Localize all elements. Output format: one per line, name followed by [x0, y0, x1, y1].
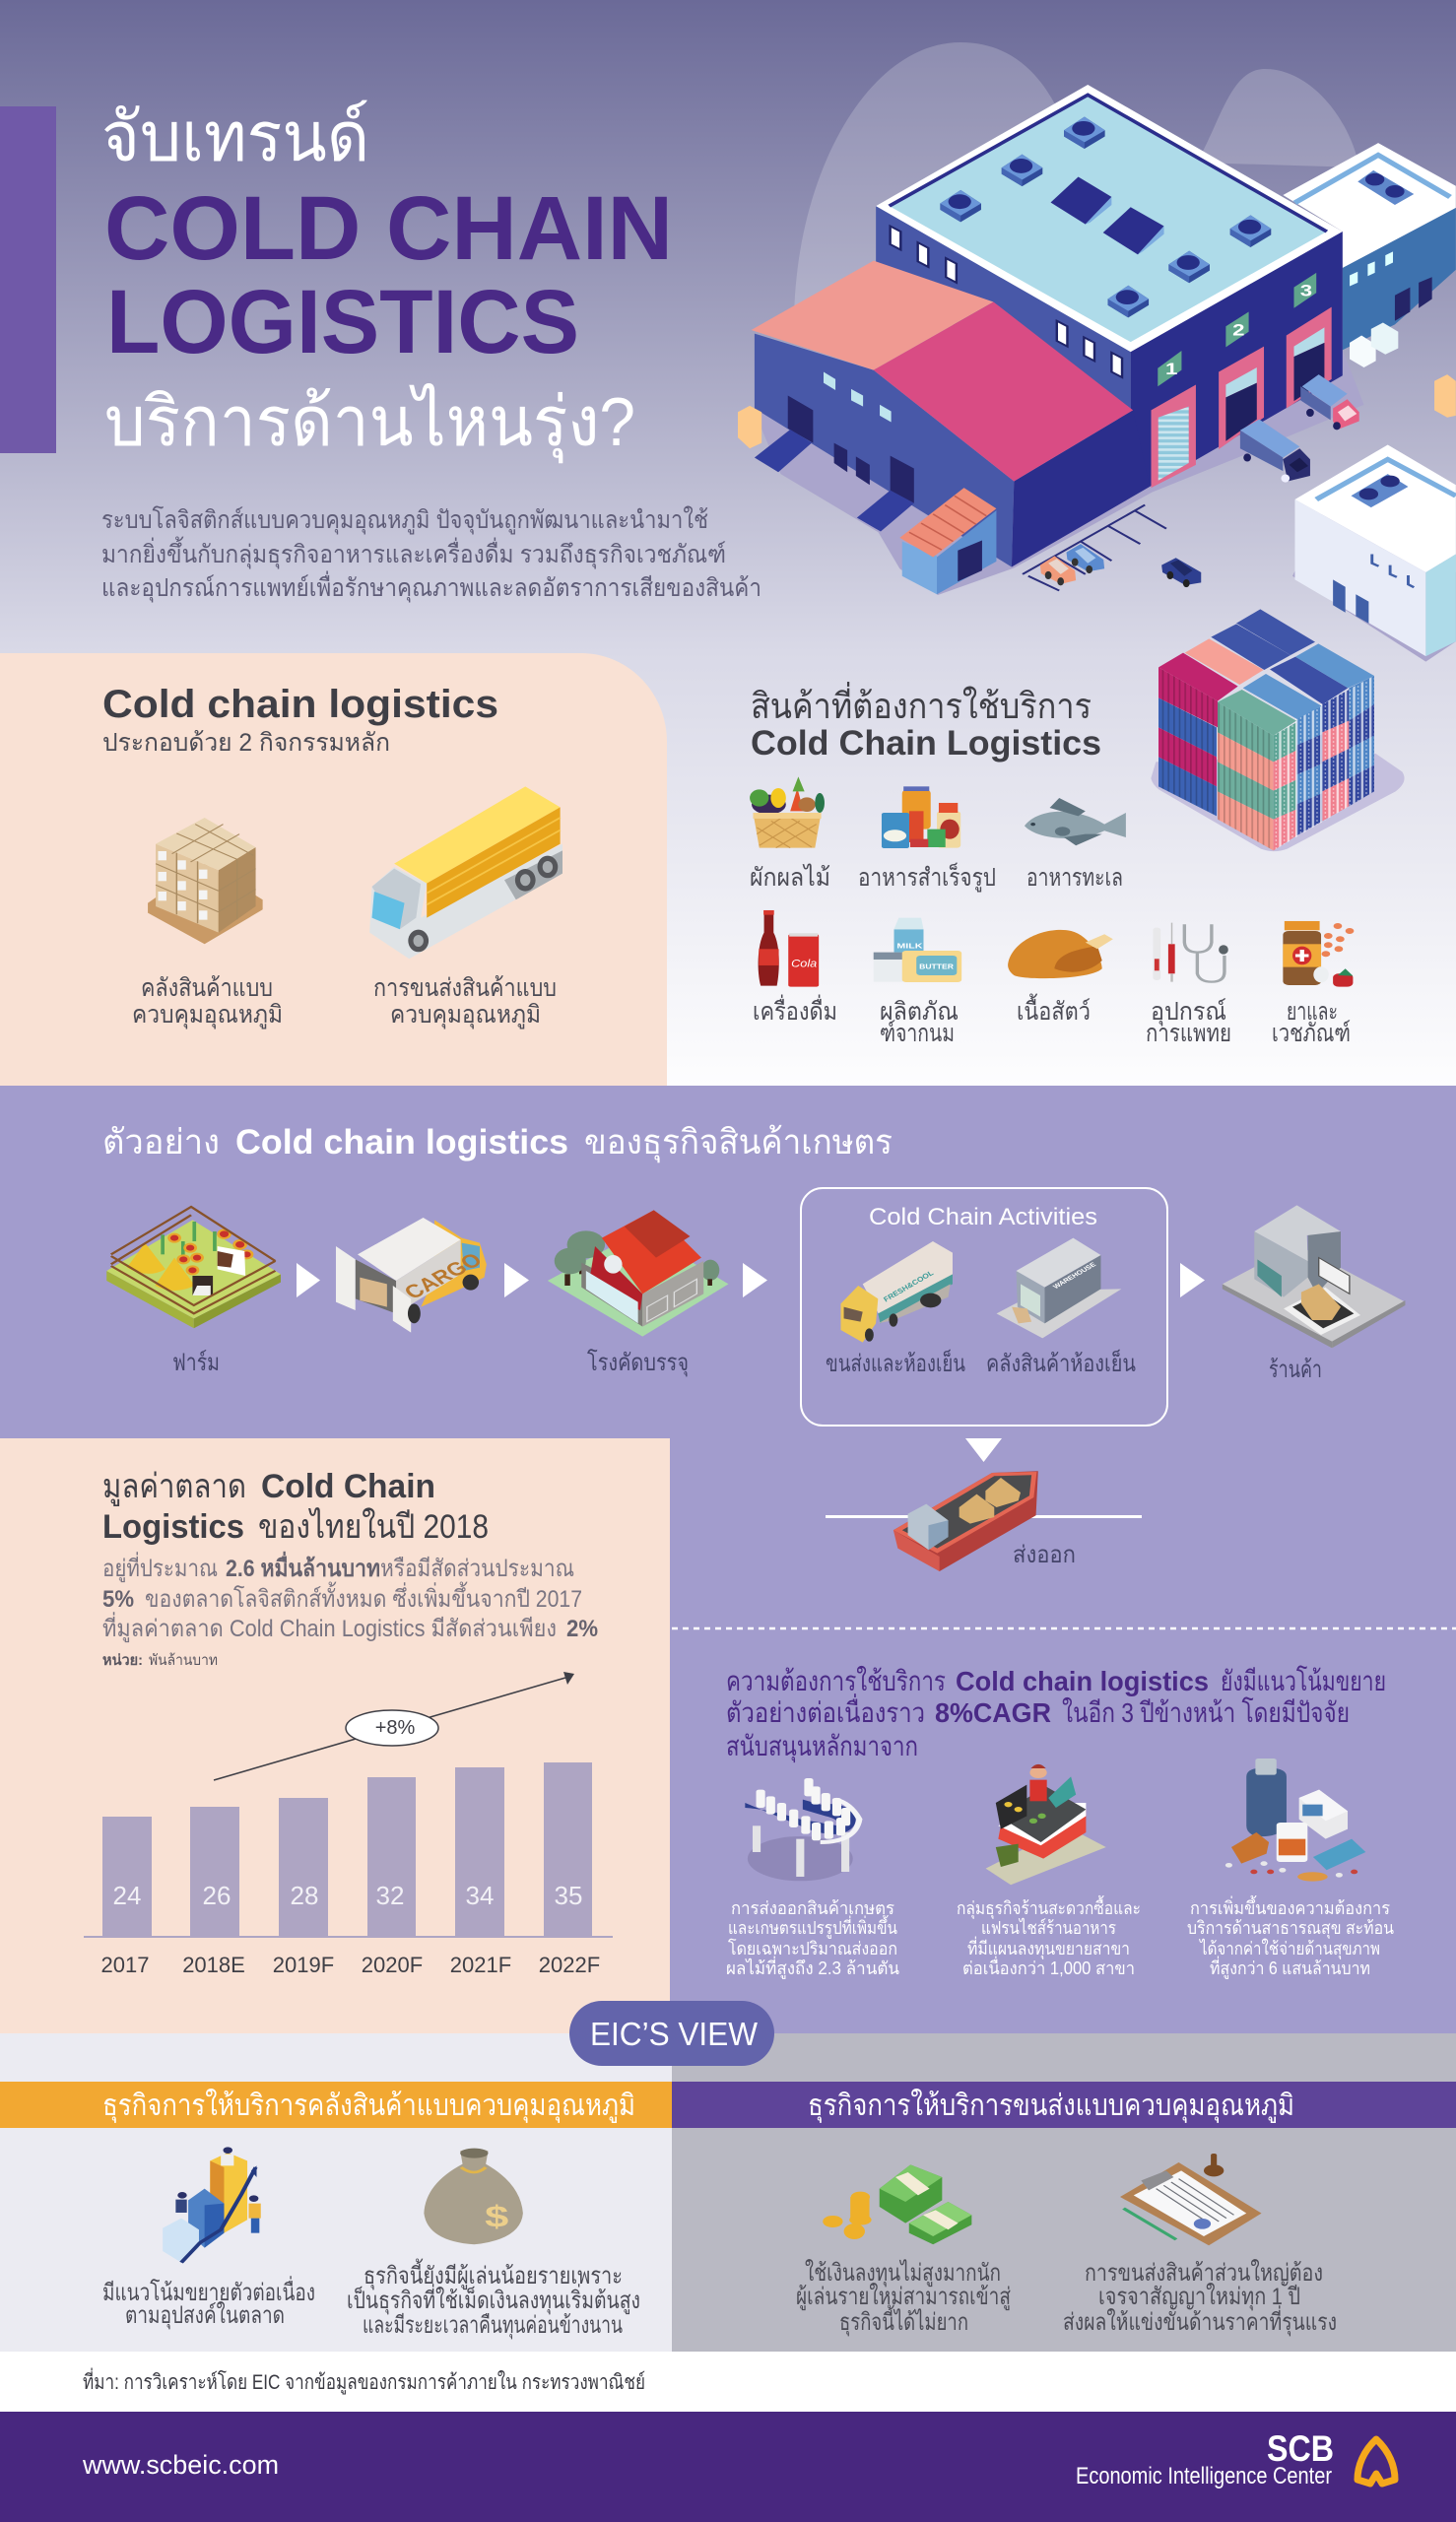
door numbers: [1158, 273, 1316, 386]
header: transport business: ธุรกิจการให้บริการขนส่งแบบควบคุมอุณหภูมิ: [808, 2089, 1294, 2124]
label: warehouse cold room: คลังสินค้าห้องเย็น: [986, 1349, 1136, 1377]
icon: conveyor bottles: [745, 1778, 859, 1881]
text: warehouse investment: เป็นธุรกิจที่ใช้เม็ดเงินลงทุนเริ่มต้นสูง: [347, 2284, 640, 2315]
text: driver two: ต่อเนื่องกว่า 1,000 สาขา: [962, 1956, 1135, 1978]
icon: dairy: [874, 918, 961, 982]
text: driver one: ผลไม้ที่สูงถึง 2.3 ล้านตัน: [726, 1956, 899, 1979]
text: market value description: ที่มูลค่าตลาด Cold Chain Logistics มีสัดส่วนเพียง: [102, 1612, 557, 1643]
label: export: ส่งออก: [1013, 1542, 1076, 1568]
unit note: หน่วย:: [102, 1652, 143, 1669]
intro paragraph: ระบบโลจิสติกส์แบบควบคุมอุณหภูมิ ปัจจุบันถูกพัฒนาและนำมาใช้: [101, 505, 708, 535]
label: cold storage: [132, 974, 283, 1029]
icon: store: [1223, 1205, 1405, 1348]
text: transport investment: [796, 2259, 1011, 2337]
label: medical equipment: อุปกรณ์: [1151, 998, 1226, 1027]
icon: cargo truck: [336, 1218, 487, 1333]
text: demand outlook: สนับสนุนหลักมาจาก: [726, 1731, 918, 1763]
icon: fish: [1025, 798, 1126, 845]
building: main cold store: [876, 85, 1343, 488]
text: driver three: ที่สูงกว่า 6 แสนล้านบาท: [1210, 1956, 1370, 1979]
icon: pallet of boxes: [148, 818, 263, 944]
text: warehouse investment: ธุรกิจนี้ยังมีผู้เล่นน้อยรายเพราะ: [364, 2258, 623, 2290]
heading: goods requiring cold chain: [751, 682, 1101, 763]
intro paragraph: มากยิ่งขึ้นกับกลุ่มธุรกิจอาหารและเครื่องดื่ม รวมถึงธุรกิจเวชภัณฑ์: [101, 536, 726, 569]
icon: medicine bottle: [1283, 921, 1354, 987]
background gradient: [0, 0, 1456, 1086]
icons: goods row one: [750, 776, 1126, 848]
label: pharmaceuticals: เวชภัณฑ์: [1272, 1020, 1351, 1047]
unit note: พันล้านบาท: [149, 1652, 218, 1669]
text: driver one: [726, 1898, 899, 1979]
building: front right white: [1292, 445, 1456, 662]
heading: agricultural example: ตัวอย่าง: [102, 1123, 220, 1161]
icon: cargo ship: [893, 1471, 1038, 1571]
panel: cold chain logistics activities: [0, 653, 667, 1086]
header: transport business: [672, 2082, 1456, 2128]
panel: warehouse business: [0, 2033, 672, 2352]
intro paragraph: [101, 505, 761, 603]
heading: market value: Cold Chain: [261, 1468, 435, 1505]
panel: transport business: [672, 2033, 1456, 2352]
text: driver three: การเพิ่มขึ้นของความต้องการ: [1190, 1895, 1390, 1918]
text: demand outlook: Cold chain logistics: [956, 1666, 1209, 1696]
icon: convenience store counter: [986, 1764, 1106, 1885]
icon: clipboard contract: [1120, 2154, 1262, 2245]
illustration: container stack: [1151, 609, 1405, 851]
bar chart: 2020F: [362, 1953, 423, 1977]
door numbers: 3: [1300, 282, 1312, 300]
label: seafood: อาหารทะเล: [1026, 864, 1123, 892]
text: market value description: 5%: [102, 1586, 134, 1613]
label: fresh produce: ผักผลไม้: [750, 863, 830, 892]
door numbers: 1: [1165, 360, 1177, 378]
label: farm: ฟาร์ม: [172, 1349, 220, 1376]
logo: SCB: [1357, 2439, 1395, 2484]
text: market value description: ของตลาดโลจิสติกส์ทั้งหมด ซึ่งเพิ่มขึ้นจากปี 2017: [145, 1581, 582, 1613]
text: demand outlook: ตัวอย่างต่อเนื่องราว: [726, 1693, 925, 1728]
badge: EIC's view: [569, 2001, 774, 2066]
hero illustration: warehouse complex: [738, 85, 1456, 662]
text: demand outlook: ความต้องการใช้บริการ: [726, 1665, 946, 1696]
label: packing house: โรงคัดบรรจุ: [587, 1349, 689, 1377]
panel: purple supply chain section: [0, 1086, 1456, 2033]
brand text: SCB: [1267, 2428, 1334, 2469]
title: บริการด้านไหนรุ่ง?: [104, 383, 635, 464]
door numbers: 2: [1232, 321, 1245, 340]
badge: EIC's view: EIC’S VIEW: [590, 2016, 759, 2052]
icon: money bag: $: [485, 2199, 508, 2233]
footer: [0, 2412, 1456, 2522]
heading: market value: [102, 1468, 489, 1546]
text: driver two: ที่มีแผนลงทุนขยายสาขา: [967, 1936, 1130, 1959]
icon: refrigerated truck: [840, 1241, 953, 1343]
label: pharmaceuticals: [1272, 998, 1351, 1047]
text: transport contracts: [1063, 2259, 1337, 2337]
building: pitched roof warehouse: [752, 261, 1150, 566]
label: processed food: อาหารสำเร็จรูป: [858, 862, 996, 893]
text: transport investment: ผู้เล่นรายใหม่สามารถเข้าสู่: [796, 2283, 1011, 2311]
brand text: Economic Intelligence Center: [1076, 2463, 1332, 2489]
cars: [1040, 544, 1201, 587]
icon: medical equipment: [1153, 923, 1228, 982]
icon: yellow truck: [369, 786, 563, 959]
heading: market value: Logistics: [102, 1508, 244, 1546]
ground shadow: [755, 350, 1364, 595]
unit note: [102, 1652, 218, 1669]
title: จับเทรนด์: [101, 99, 369, 175]
label: meat: เนื้อสัตว์: [1017, 993, 1091, 1026]
heading: market value: ของไทยในปี 2018: [258, 1507, 489, 1546]
text: driver two: [957, 1895, 1141, 1978]
text: demand outlook: 8%CAGR: [935, 1697, 1051, 1728]
text: driver three: [1187, 1895, 1394, 1979]
text: transport contracts: เจรจาสัญญาใหม่ทุก 1 ปี: [1098, 2283, 1300, 2311]
bar chart: [84, 1762, 613, 1977]
panel: cold chain activities box: [801, 1188, 1167, 1426]
bar chart: 2021F: [450, 1953, 511, 1977]
title: LOGISTICS: [106, 272, 579, 372]
label: cold transport: การขนส่งสินค้าแบบ: [373, 974, 557, 1002]
label: transport cold room: ขนส่งและห้องเย็น: [826, 1349, 965, 1377]
bar chart: 26: [203, 1881, 231, 1910]
bar chart: 24: [113, 1881, 141, 1910]
label: dairy: ผลิตภัณ: [880, 998, 959, 1026]
label: cold storage: คลังสินค้าแบบ: [141, 974, 273, 1002]
divider: [672, 1627, 1456, 1629]
icon: dairy: MILK: [896, 942, 923, 950]
text: driver two: กลุ่มธุรกิจร้านสะดวกซื้อและ: [957, 1895, 1141, 1919]
icon: farm: [106, 1207, 281, 1328]
label: medical equipment: การแพทย: [1146, 1020, 1231, 1047]
text: transport contracts: ส่งผลให้แข่งขันด้านราคาที่รุนแรง: [1063, 2305, 1337, 2337]
parking lines: [1023, 505, 1166, 591]
title: COLD CHAIN: [104, 178, 673, 279]
text: driver two: แฟรนไชส์ร้านอาหาร: [981, 1917, 1116, 1938]
text: driver three: ได้จากค่าใช้จ่ายด้านสุขภาพ: [1198, 1938, 1380, 1959]
heading: cold chain logistics: Cold chain logistics: [102, 683, 498, 726]
text: market value description: อยู่ที่ประมาณ: [102, 1552, 218, 1583]
intro paragraph: และอุปกรณ์การแพทย์เพื่อรักษาคุณภาพและลดอัตราการเสียของสินค้า: [101, 570, 761, 603]
heading: agricultural example: ของธุรกิจสินค้าเกษตร: [584, 1123, 893, 1162]
text: demand outlook: ในอีก 3 ปีข้างหน้า โดยมีปัจจัย: [1062, 1696, 1350, 1728]
text: warehouse investment: [347, 2258, 640, 2340]
icon: growth chart with people: [163, 2147, 261, 2263]
heading: cold chain logistics: [102, 683, 498, 757]
loading doors: [1152, 307, 1332, 488]
text: driver one: และเกษตรแปรรูปที่เพิ่มขึ้น: [728, 1915, 897, 1939]
label: cold transport: ควบคุมอุณหภูมิ: [390, 1001, 541, 1029]
icon: roast chicken: [1008, 930, 1113, 978]
text: demand outlook: [726, 1665, 1386, 1763]
trucks: [1240, 374, 1359, 483]
icon: cold warehouse: WAREHOUSE: [1052, 1262, 1098, 1291]
export line: [826, 1515, 1142, 1518]
label: cold storage: ควบคุมอุณหภูมิ: [132, 1001, 283, 1029]
bar chart: 35: [555, 1881, 582, 1910]
text: driver one: โดยเฉพาะปริมาณส่งออก: [728, 1938, 897, 1958]
source strip: [0, 2352, 1456, 2412]
bar chart: 32: [376, 1881, 404, 1910]
trend arrow with growth callout: [214, 1672, 574, 1780]
stacked boxes: [738, 323, 1456, 448]
heading: goods requiring cold chain: สินค้าที่ต้องการใช้บริการ: [751, 682, 1092, 726]
text: demand outlook: ยังมีแนวโน้มขยาย: [1221, 1665, 1386, 1696]
icon: refrigerated truck: FRESH&COOL: [881, 1269, 936, 1303]
icon: cold warehouse: [997, 1238, 1121, 1338]
icon: cola: [759, 910, 819, 987]
icon: basket: [750, 776, 825, 848]
label: beverages: เครื่องดื่ม: [753, 994, 837, 1026]
hero background blobs: [794, 42, 1359, 325]
text: warehouse trend: มีแนวโน้มขยายตัวต่อเนื่อง: [102, 2276, 315, 2306]
website: www.scbeic.com: [82, 2450, 279, 2480]
icons: goods row two: [759, 910, 1354, 987]
icon: packing house: [548, 1210, 728, 1337]
header: warehouse business: ธุรกิจการให้บริการคลังสินค้าแบบควบคุมอุณหภูมิ: [102, 2089, 635, 2124]
arrow: [743, 1263, 767, 1297]
arrow: [1180, 1263, 1205, 1297]
text: transport contracts: การขนส่งสินค้าส่วนใหญ่ต้อง: [1085, 2259, 1323, 2287]
label: dairy: ฑ์จากนม: [880, 1020, 955, 1047]
header: warehouse business: [0, 2082, 672, 2128]
icon: packaged food: [882, 786, 960, 848]
text: warehouse trend: ตามอุปสงค์ในตลาด: [125, 2301, 285, 2330]
arrow down: [965, 1438, 1002, 1462]
source strip: ที่มา: การวิเคราะห์โดย EIC จากข้อมูลของกรมการค้าภายใน กระทรวงพาณิชย์: [83, 2367, 645, 2395]
arrow: [504, 1263, 529, 1297]
label: store: ร้านค้า: [1269, 1357, 1322, 1383]
bar chart: 34: [466, 1881, 494, 1910]
building: rear right: [1283, 143, 1456, 350]
heading: market value: มูลค่าตลาด: [102, 1468, 246, 1506]
bar chart: 2022F: [539, 1953, 600, 1977]
text: warehouse investment: และมีระยะเวลาคืนทุนค่อนข้างนาน: [363, 2312, 623, 2340]
heading: goods requiring cold chain: Cold Chain Logistics: [751, 724, 1101, 763]
text: transport investment: ธุรกิจนี้ได้ไม่ยาก: [839, 2304, 968, 2337]
bar chart: 2019F: [273, 1953, 334, 1977]
bar chart: 2017: [101, 1953, 149, 1977]
shed: [899, 488, 996, 594]
icon: medicines: [1225, 1759, 1365, 1882]
label: dairy: [880, 998, 959, 1047]
icon: money bag: [424, 2149, 523, 2244]
icon: cola: Cola: [791, 958, 817, 969]
arrow: [297, 1263, 320, 1297]
panel: market value: [0, 1438, 670, 2033]
text: warehouse trend: [102, 2276, 315, 2330]
heading: agricultural example: Cold chain logistics: [235, 1123, 568, 1161]
panel: cold chain activities box: Cold Chain Activities: [869, 1204, 1097, 1230]
text: market value description: 2%: [566, 1616, 598, 1642]
text: driver one: การส่งออกสินค้าเกษตร: [731, 1898, 894, 1918]
text: driver three: บริการด้านสาธารณสุข สะท้อน: [1187, 1918, 1394, 1939]
heading: agricultural example: [102, 1123, 893, 1162]
title: [101, 99, 673, 464]
text: market value description: หรือมีสัดส่วนประมาณ: [380, 1556, 574, 1582]
trend arrow with growth callout: +8%: [375, 1717, 416, 1739]
text: market value description: [102, 1551, 598, 1643]
bar chart: 28: [291, 1881, 318, 1910]
text: market value description: 2.6 หมื่นล้านบาท: [226, 1551, 380, 1582]
brand text: [1076, 2428, 1334, 2489]
icon: dairy: BUTTER: [919, 962, 954, 970]
bar chart: 2018E: [182, 1953, 245, 1977]
heading: cold chain logistics: ประกอบด้วย 2 กิจกรรมหลัก: [102, 729, 390, 757]
label: cold transport: [373, 974, 557, 1029]
icon: cash and coins: [823, 2164, 971, 2244]
icon: cargo truck: CARGO: [399, 1248, 487, 1303]
label: pharmaceuticals: ยาและ: [1287, 998, 1338, 1026]
hero side bar: [0, 106, 56, 453]
text: transport investment: ใช้เงินลงทุนไม่สูงมากนัก: [805, 2259, 1001, 2288]
label: medical equipment: [1146, 998, 1231, 1047]
